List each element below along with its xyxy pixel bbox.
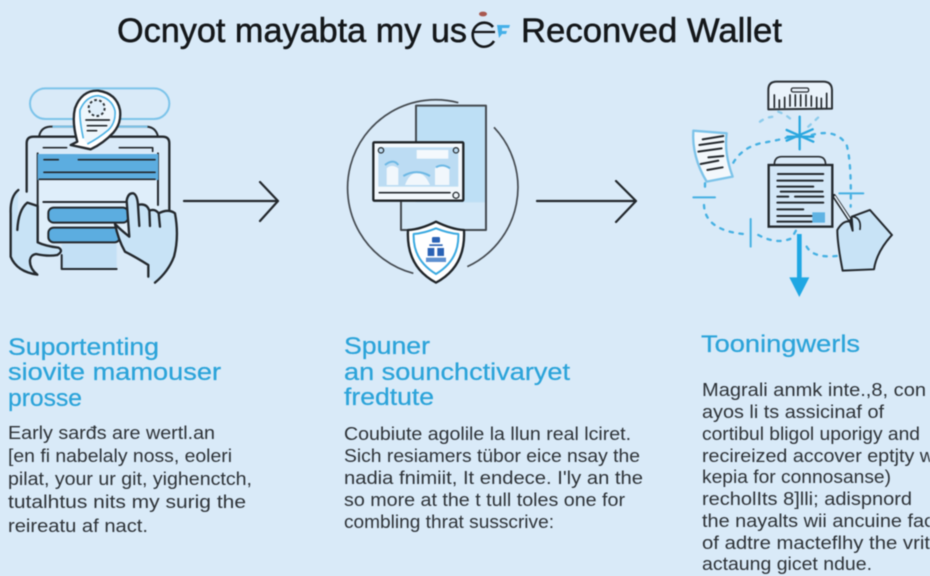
column 2 body text: Sich resiamers tübor eice nsay the bbox=[344, 445, 640, 466]
location bubble bbox=[71, 91, 120, 149]
column 2 heading: Spuner bbox=[344, 333, 430, 360]
header pill bbox=[30, 88, 169, 119]
column 2 body text: Coubiute agolile la llun real lciret. bbox=[344, 423, 631, 444]
column 1 heading: siovite mamouser bbox=[8, 359, 221, 386]
column 3 body text: recholIts 8]lli; adispnord bbox=[702, 488, 912, 509]
title end text: Reconved Wallet bbox=[521, 12, 783, 50]
column 2 body text: combling thrat susscrive: bbox=[344, 511, 554, 532]
phone bbox=[401, 106, 486, 230]
column 3 body text: kepia for connosanse) bbox=[702, 466, 891, 487]
shield badge bbox=[408, 222, 464, 283]
column 3 body text: of adtre macteflhy the vrit bbox=[702, 532, 930, 553]
arrow: step two to three bbox=[537, 181, 636, 222]
column 1 body text: tutalhtus nits my surig the bbox=[8, 491, 246, 512]
column 2 heading bbox=[344, 333, 570, 411]
title: Ocnyot mayabta my us bbox=[117, 12, 467, 50]
icon: tablet with hands bbox=[11, 88, 177, 283]
column 1 body text: pilat, your ur git, yighenctch, bbox=[8, 468, 252, 489]
column 1 body text: [en fi nabelaly noss, eoleri bbox=[8, 445, 232, 466]
main document bbox=[769, 157, 832, 227]
column 2 heading: fredtute bbox=[344, 384, 434, 411]
column 1 heading bbox=[8, 334, 221, 412]
column 1 body text bbox=[8, 422, 252, 536]
column 3 body text: Magrali anmk inte.,8, con bbox=[702, 379, 926, 400]
column 3 body text: recireized accover eptjty w bbox=[702, 445, 930, 466]
ring bbox=[348, 100, 518, 273]
column 3 body text bbox=[702, 379, 930, 574]
right hand bbox=[115, 193, 177, 283]
shield symbol bbox=[426, 237, 446, 262]
burst node bbox=[787, 117, 813, 149]
column 2 body text: so more at the t tull toles one for bbox=[344, 489, 625, 510]
icon: title logo glyph bbox=[473, 12, 510, 47]
icon: document workflow bbox=[693, 82, 892, 297]
column 2 body text: nadia fnimiit, It endece. I'ly an the bbox=[344, 467, 643, 488]
dashed connectors bbox=[704, 112, 851, 256]
column 3 heading: Tooningwerls bbox=[701, 331, 860, 358]
arrow: step one to two bbox=[184, 182, 278, 221]
picture card bbox=[373, 142, 463, 201]
tick marks bbox=[693, 193, 863, 247]
down arrow bbox=[789, 234, 809, 297]
scanner device bbox=[768, 82, 832, 109]
column 2 body text bbox=[344, 423, 643, 532]
column 3 body text: actaung gicet ndue. bbox=[702, 553, 872, 574]
icon: card and shield in circle bbox=[348, 100, 518, 283]
left hand bbox=[11, 190, 61, 275]
column 1 body text: reireatu af nact. bbox=[8, 515, 148, 536]
pen and hand bbox=[834, 196, 892, 271]
tablet body bbox=[27, 127, 169, 243]
column 3 body text: cortibul bligol uporigy and bbox=[702, 423, 920, 444]
column 1 heading: prosse bbox=[8, 385, 82, 412]
title bbox=[117, 12, 783, 50]
form fields bbox=[48, 208, 128, 269]
column 3 body text: the nayalts wii ancuine fac bbox=[702, 510, 930, 531]
column 1 body text: Early sarđs are wertl.an bbox=[8, 422, 215, 443]
column 3 body text: ayos li ts assicinaf of bbox=[702, 401, 885, 422]
column 2 heading: an sounchctivaryet bbox=[344, 359, 570, 386]
loose page bbox=[693, 131, 733, 182]
column 1 heading: Suportenting bbox=[8, 334, 159, 361]
